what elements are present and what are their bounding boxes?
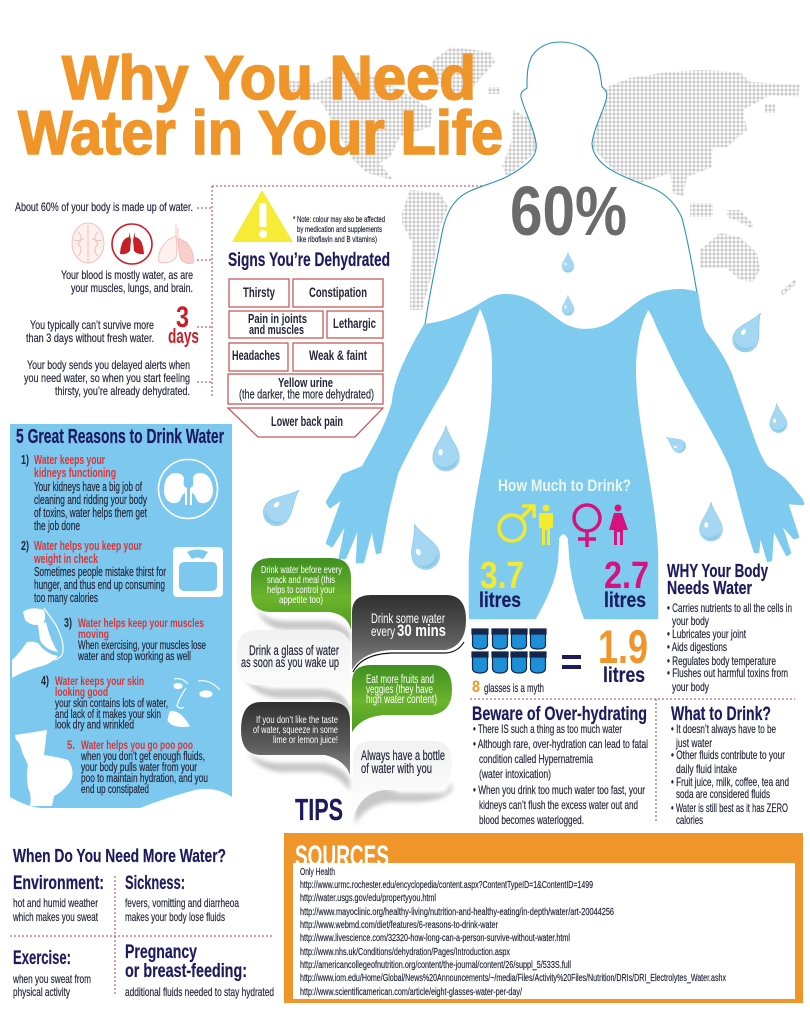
bubble: lemon juice: If you don’t like the taste bbox=[256, 714, 338, 726]
panel: why your body needs water: your body bbox=[672, 680, 709, 694]
bubble: glass on waking: as soon as you wake up bbox=[241, 655, 339, 670]
bubble: lemon juice bbox=[241, 702, 350, 775]
bubble shadows bbox=[240, 606, 452, 825]
reason 4 bbox=[41, 674, 168, 732]
icon: eight glasses bbox=[472, 629, 546, 673]
panel: when do you need more water: additional fluids needed to stay hydrated bbox=[125, 985, 274, 999]
reason 5 bbox=[67, 740, 208, 796]
bubble: every 30 mins: 30 mins bbox=[397, 621, 446, 640]
panel: beware of over-hydrating: Beware of Over-hydrating bbox=[472, 704, 647, 725]
icon: lungs bbox=[112, 224, 152, 264]
reason 4: 4) bbox=[41, 674, 49, 688]
intro facts: You typically can’t survive more bbox=[30, 318, 154, 332]
panel: signs you're dehydrated: and muscles bbox=[249, 322, 304, 337]
reason 1: cleaning and ridding your body bbox=[34, 493, 147, 507]
panel: signs you're dehydrated: Weak & faint bbox=[309, 347, 367, 363]
panel: beware of over-hydrating: (water intoxication) bbox=[479, 767, 551, 781]
reason 3: 3) bbox=[64, 616, 72, 630]
bubble: bottle of water: Always have a bottle bbox=[361, 748, 445, 763]
intro facts: your muscles, lungs, and brain. bbox=[71, 281, 193, 295]
panel: sources: SOURCES bbox=[295, 840, 389, 873]
panel: what to drink: What to Drink? bbox=[671, 704, 771, 725]
panel: when do you need more water: When Do You Need More Water? bbox=[13, 846, 226, 866]
bubble: lemon juice: of water, squeeze in some bbox=[253, 724, 338, 736]
panel: how much to drink: 1.9 bbox=[598, 620, 648, 673]
bubble: every 30 mins bbox=[352, 595, 466, 672]
dividers bbox=[470, 699, 795, 822]
panel: how much to drink: litres bbox=[603, 664, 645, 687]
body silhouette: empty upper half bbox=[425, 42, 697, 340]
title bbox=[18, 44, 503, 168]
reason 2: 2) bbox=[21, 539, 29, 553]
panel: when do you need more water: Exercise: bbox=[13, 948, 71, 969]
reason 1 bbox=[21, 453, 147, 533]
bubble: glass on waking: Drink a glass of water bbox=[249, 643, 339, 658]
panel: signs you're dehydrated: (the darker, the more dehydrated) bbox=[239, 388, 374, 402]
panel: how much to drink bbox=[472, 476, 649, 696]
world map bbox=[280, 47, 800, 310]
panel: why your body needs water bbox=[667, 561, 792, 694]
panel: sources: http://www.urmc.rochester.edu/encyclopedia/content.aspx?ContentTypeID=1&ContentID=1499 bbox=[300, 880, 593, 891]
panel: when do you need more water: hot and humid weather bbox=[13, 896, 98, 910]
bubble: fruits and veggies: veggies (they have bbox=[366, 684, 433, 696]
reason 1: the job done bbox=[34, 519, 80, 533]
panel: when do you need more water: Sickness: bbox=[125, 873, 185, 894]
bubble: drink before meals bbox=[251, 558, 351, 630]
panel: signs you're dehydrated: * Note: colour may also be affected bbox=[293, 214, 385, 224]
panel: signs you're dehydrated: Yellow urine bbox=[278, 375, 333, 390]
panel: tips bbox=[237, 558, 466, 827]
panel: how much to drink: 8 bbox=[472, 677, 480, 696]
panel: sources: http://water.usgs.gov/edu/propertyyou.html bbox=[300, 893, 436, 904]
reason 2 bbox=[21, 539, 166, 605]
reason 1: kidneys functioning bbox=[34, 466, 116, 480]
body silhouette: water fill bbox=[327, 290, 803, 618]
panel: what to drink: just water bbox=[675, 736, 712, 750]
icon: face bbox=[168, 679, 220, 726]
panel: how much to drink: glasses is a myth bbox=[484, 681, 544, 695]
reason 1: of toxins, water helps them get bbox=[34, 506, 147, 520]
title: Water in Your Life bbox=[18, 99, 503, 168]
panel: how much to drink: 2.7 bbox=[604, 555, 649, 597]
reason 2: Sometimes people mistake thirst for bbox=[34, 565, 166, 579]
dotted connector lines bbox=[197, 186, 520, 397]
panel: signs you're dehydrated: by medication and supplements bbox=[297, 224, 382, 234]
bubble: lemon juice: lime or lemon juice! bbox=[273, 734, 338, 746]
reason 5: end up constipated bbox=[81, 784, 149, 796]
panel: why your body needs water: • Lubricates your joint bbox=[667, 627, 746, 641]
panel: when do you need more water: which makes you sweat bbox=[12, 910, 98, 924]
icon: male symbol and figure bbox=[499, 504, 553, 545]
panel: what to drink bbox=[671, 704, 789, 827]
panel: when do you need more water: or breast-feeding: bbox=[125, 961, 247, 982]
panel: how much to drink: How Much to Drink? bbox=[498, 476, 631, 495]
reason 1: Water keeps your bbox=[34, 453, 105, 467]
reason 4: your skin contains lots of water, bbox=[55, 698, 168, 710]
reason 4: look dry and wrinkled bbox=[55, 720, 134, 732]
reason 4: looking good bbox=[55, 687, 108, 699]
panel: when do you need more water bbox=[10, 846, 274, 999]
bubble: drink before meals: Drink water before every bbox=[261, 564, 343, 576]
panel: signs you're dehydrated: Headaches bbox=[232, 347, 280, 363]
icon: toilet bbox=[15, 730, 72, 806]
reason 5: when you don’t get enough fluids, bbox=[80, 751, 205, 763]
icon: female symbol and figure bbox=[574, 504, 628, 547]
reason 2: too many calories bbox=[34, 591, 98, 605]
reason 3 bbox=[64, 616, 206, 663]
panel: signs you're dehydrated: Constipation bbox=[309, 284, 367, 300]
panel: beware of over-hydrating: • There IS such a thing as too much water bbox=[473, 722, 622, 736]
panel: signs you're dehydrated: Lower back pain bbox=[271, 414, 343, 429]
bubble: fruits and veggies bbox=[352, 665, 452, 732]
icon: flexed arm bbox=[12, 608, 63, 678]
bubble: every 30 mins: Drink some water bbox=[371, 610, 445, 626]
intro facts: About 60% of your body is made up of water. bbox=[15, 200, 193, 214]
bubble: drink before meals: appetite too) bbox=[279, 594, 323, 606]
reason 4: Water keeps your skin bbox=[55, 676, 144, 688]
intro facts bbox=[15, 200, 199, 398]
water drops bbox=[258, 252, 788, 573]
icon: kidneys bbox=[158, 460, 218, 518]
panel: sources: http://www.nhs.uk/Conditions/dehydration/Pages/Introduction.aspx bbox=[300, 947, 510, 958]
panel: beware of over-hydrating: • Although rare, over-hydration can lead to fatal bbox=[473, 737, 648, 751]
reason 3: moving bbox=[78, 629, 109, 641]
bubble: every 30 mins: every bbox=[371, 623, 395, 639]
icon: brain bbox=[72, 223, 104, 263]
reason 5: poo to maintain hydration, and you bbox=[81, 773, 208, 785]
panel: beware of over-hydrating: • When you drink too much water too fast, your bbox=[473, 783, 645, 797]
intro facts: thirsty, you’re already dehydrated. bbox=[55, 384, 190, 398]
reason 1: Your kidneys have a big job of bbox=[34, 480, 142, 494]
reason 5: Water helps you go poo poo bbox=[81, 740, 193, 752]
panel: what to drink: daily fluid intake bbox=[676, 762, 737, 776]
panel: 5 great reasons: 5 Great Reasons to Drink Water bbox=[16, 426, 224, 448]
icon: warning triangle bbox=[232, 190, 293, 242]
intro facts: Your body sends you delayed alerts when bbox=[27, 358, 190, 372]
panel: when do you need more water: Pregnancy bbox=[125, 942, 197, 963]
icon: weight scale bbox=[173, 547, 223, 597]
panel: when do you need more water: fevers, vomitting and diarrheoa bbox=[125, 896, 239, 910]
panel: when do you need more water: Environment: bbox=[13, 873, 104, 894]
panel: why your body needs water: your body bbox=[672, 614, 709, 628]
reason 3: water and stop working as well bbox=[77, 651, 191, 663]
bubble: drink before meals: snack and meal (this bbox=[267, 574, 335, 586]
panel: signs you're dehydrated: Lethargic bbox=[333, 315, 376, 331]
reason 4: and lack of it makes your skin bbox=[55, 709, 161, 721]
panel: 5 great reasons bbox=[10, 424, 232, 808]
panel: why your body needs water: • Aids digestions bbox=[667, 640, 727, 654]
panel: when do you need more water: when you sweat from bbox=[12, 972, 91, 986]
intro facts: Your blood is mostly water, as are bbox=[61, 268, 193, 282]
bubble: drink before meals: helps to control your bbox=[267, 584, 335, 596]
reason 2: weight in check bbox=[33, 552, 98, 566]
panel: sources: http://americancollegeofnutrition.org/content/the-journal/content/26/suppl_5/533S.full bbox=[300, 960, 571, 971]
panel: signs you're dehydrated: Thirsty bbox=[243, 284, 275, 300]
bubble: fruits and veggies: Eat more fruits and bbox=[366, 674, 434, 686]
bubble: fruits and veggies: high water content) bbox=[366, 694, 437, 706]
intro facts: days bbox=[168, 326, 199, 348]
panel: beware of over-hydrating: blood becomes waterlogged. bbox=[479, 813, 584, 827]
reason 5: 5. bbox=[67, 740, 75, 752]
panel: signs you're dehydrated: Pain in joints bbox=[248, 311, 307, 326]
panel: what to drink: calories bbox=[676, 813, 703, 827]
panel: when do you need more water: physical activity bbox=[13, 985, 70, 999]
panel: why your body needs water: Needs Water bbox=[667, 578, 752, 598]
panel: sources: http://www.livescience.com/32320-how-long-can-a-person-survive-without-water.html bbox=[300, 933, 570, 944]
title: Why You Need bbox=[62, 44, 476, 113]
panel: sources: Only Health bbox=[300, 867, 335, 878]
panel: signs you're dehydrated bbox=[228, 190, 390, 437]
reason 3: Water helps keep your muscles bbox=[78, 618, 204, 630]
panel: how much to drink: 3.7 bbox=[480, 555, 524, 597]
reason 3: When exercising, your muscles lose bbox=[78, 640, 206, 652]
panel: sources: http://www.scientificamerican.com/article/eight-glasses-water-per-day/ bbox=[300, 987, 522, 998]
panel: when do you need more water: makes your body lose fluids bbox=[125, 910, 225, 924]
bubble: bottle of water: of water with you bbox=[361, 761, 432, 776]
reason 5: your body pulls water from your bbox=[81, 762, 197, 774]
bubble: glass on waking bbox=[237, 630, 350, 707]
intro facts: you need water, so when you start feeling bbox=[24, 371, 190, 385]
reason 2: Water helps you keep your bbox=[34, 539, 142, 553]
intro facts: than 3 days without fresh water. bbox=[26, 331, 154, 345]
panel: sources: http://www.webmd.com/diet/features/6-reasons-to-drink-water bbox=[300, 920, 498, 931]
panel: how much to drink: litres bbox=[479, 589, 521, 612]
intro facts: 3 bbox=[176, 301, 189, 334]
panel: sources bbox=[284, 833, 803, 1003]
panel: signs you're dehydrated: Signs You’re Dehydrated bbox=[228, 250, 390, 271]
panel: why your body needs water: WHY Your Body bbox=[667, 561, 768, 581]
tips heading: TIPS bbox=[295, 792, 343, 827]
icon: lungs pale bbox=[159, 224, 193, 263]
bubble: bottle of water bbox=[353, 741, 452, 817]
panel: how much to drink: litres bbox=[604, 589, 646, 612]
panel: beware of over-hydrating bbox=[472, 704, 648, 827]
60 percent: 60% bbox=[510, 172, 627, 250]
panel: beware of over-hydrating: kidneys can’t flush the excess water out and bbox=[479, 798, 638, 812]
panel: signs you're dehydrated: like riboflavin and B vitamins) bbox=[297, 234, 377, 244]
reason 1: 1) bbox=[21, 453, 29, 467]
reason 2: hunger, and thus end up consuming bbox=[34, 578, 165, 592]
equals sign bbox=[562, 655, 581, 669]
panel: beware of over-hydrating: condition called Hypernatremia bbox=[479, 752, 593, 766]
panel: sources: http://www.mayoclinic.org/healthy-living/nutrition-and-healthy-eating/in-depth/water/art-20044256 bbox=[300, 907, 614, 918]
